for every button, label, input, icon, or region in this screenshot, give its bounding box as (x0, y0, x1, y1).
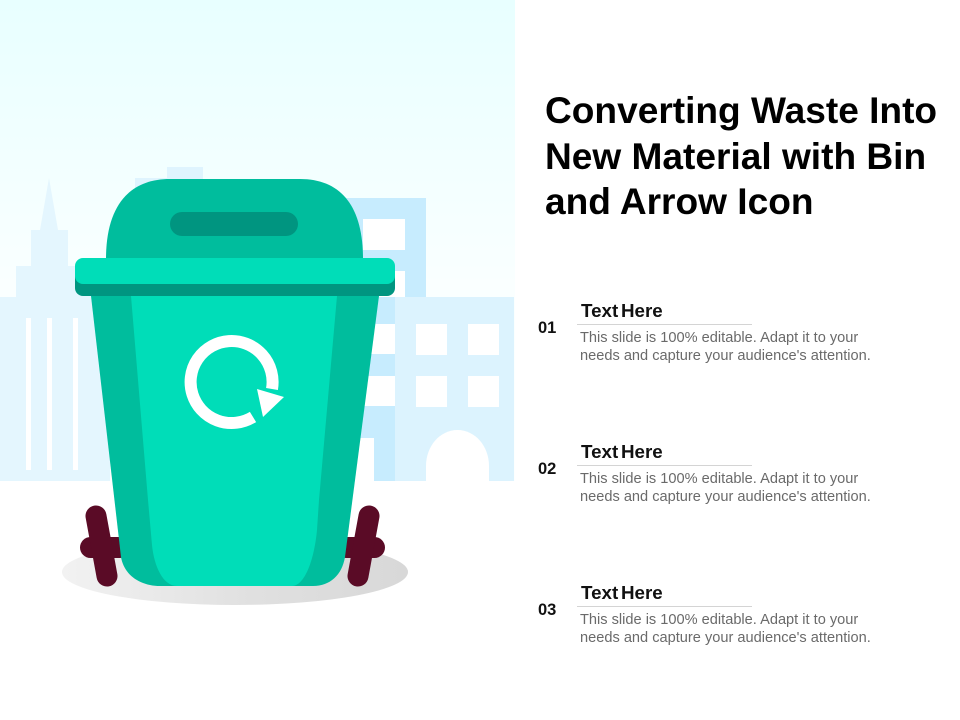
number 03: 03 (538, 601, 556, 619)
bin front panel (131, 296, 337, 586)
rim shade (75, 262, 395, 296)
right rear building (340, 198, 426, 481)
number 01: 01 (538, 319, 556, 337)
ground shadow (62, 539, 408, 605)
bin lid (75, 179, 395, 296)
text 01 (580, 330, 871, 364)
bin body (91, 296, 379, 586)
text 03 (580, 612, 871, 646)
title (545, 89, 937, 222)
title: Converting Waste Into (545, 89, 937, 131)
text 01: needs and capture your audience's attention. (580, 348, 871, 364)
heading 03: Text Here (581, 582, 663, 603)
item 03 (538, 582, 871, 646)
text 02: needs and capture your audience's attention. (580, 489, 871, 505)
lid slot (170, 212, 298, 236)
illustration: recycling bin in front of a city (0, 0, 515, 605)
left wheel (80, 516, 130, 576)
text 03: This slide is 100% editable. Adapt it to your (580, 612, 858, 628)
heading 01: Text Here (581, 300, 663, 321)
title: New Material with Bin (545, 134, 926, 176)
sky background (0, 0, 515, 481)
city skyline (0, 167, 514, 481)
number 02: 02 (538, 460, 556, 478)
text 03: needs and capture your audience's attention. (580, 630, 871, 646)
item 02 (538, 441, 871, 505)
icon: recycle arrow (191, 341, 284, 423)
right front building (395, 297, 514, 481)
left tower (0, 178, 110, 481)
back building (135, 167, 203, 198)
text 01: This slide is 100% editable. Adapt it to your (580, 330, 858, 346)
item 01 (538, 300, 871, 364)
rim (75, 258, 395, 284)
text 02 (580, 471, 871, 505)
text 02: This slide is 100% editable. Adapt it to your (580, 471, 858, 487)
heading 02: Text Here (581, 441, 663, 462)
title: and Arrow Icon (545, 180, 814, 222)
right wheel (336, 516, 385, 576)
